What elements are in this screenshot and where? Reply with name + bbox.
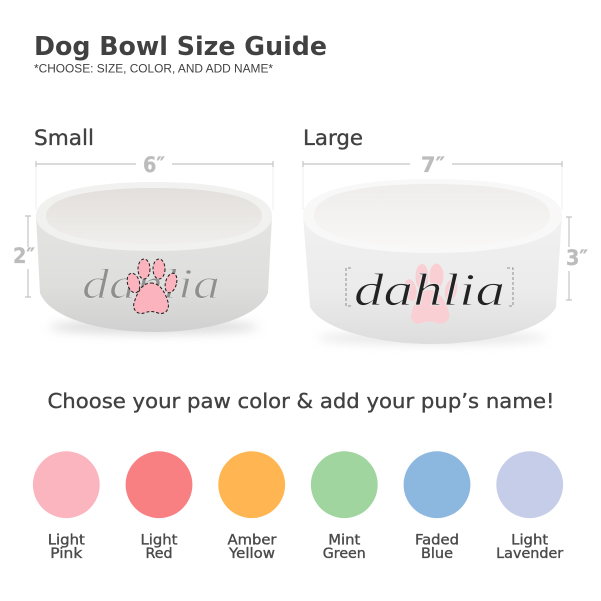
swatch: light pink: Light <box>48 532 85 548</box>
swatch: light red: Red <box>146 546 172 562</box>
swatch: faded blue: Faded <box>415 532 459 548</box>
swatch: faded blue: Blue <box>421 546 453 562</box>
height dimension: 3 inch <box>566 217 588 300</box>
bowl: small <box>36 182 272 334</box>
name frame <box>346 268 513 306</box>
width dimension: 6 inch: 6″ <box>143 153 165 177</box>
heading: Large: Large <box>303 126 363 150</box>
bowl name: dahlia: dahlia <box>354 264 505 315</box>
height dimension: 2 inch <box>13 216 35 297</box>
swatch: amber yellow: Amber <box>228 532 277 548</box>
swatch: mint green <box>311 451 378 562</box>
panel: small bowl <box>13 126 273 334</box>
height dimension: 3 inch: 3″ <box>566 246 588 270</box>
width dimension: 7 inch: 7″ <box>421 153 445 177</box>
heading: Small: Small <box>34 126 94 150</box>
swatch: mint green: Green <box>323 546 366 562</box>
width dimension: 7 inch <box>303 153 562 210</box>
swatch: light pink: Pink <box>50 546 83 562</box>
swatch: light red <box>126 451 192 562</box>
swatch: faded blue <box>404 451 470 562</box>
swatch: light red: Light <box>140 532 178 548</box>
icon: faint pink paw <box>402 264 459 324</box>
swatch: light lavender: Light <box>511 532 549 548</box>
subtitle: *CHOOSE: SIZE, COLOR, AND ADD NAME* <box>34 64 274 76</box>
swatch: light lavender <box>496 451 563 562</box>
height dimension: 2 inch: 2″ <box>13 244 35 268</box>
icon: pink paw <box>125 259 179 313</box>
width dimension: 6 inch <box>36 153 273 210</box>
swatch: light lavender: Lavender <box>496 546 563 562</box>
swatch: mint green: Mint <box>328 532 361 548</box>
title: Dog Bowl Size Guide <box>34 32 327 62</box>
bowl name: dahlia: dahlia <box>82 262 220 308</box>
panel: large bowl <box>303 126 588 344</box>
swatch: light pink <box>33 451 100 562</box>
swatch: amber yellow: Yellow <box>228 546 275 562</box>
swatch: amber yellow <box>218 451 285 562</box>
heading: choose paw color: Choose your paw color & add your pup’s name! <box>48 389 554 413</box>
bowl: large <box>303 179 562 344</box>
